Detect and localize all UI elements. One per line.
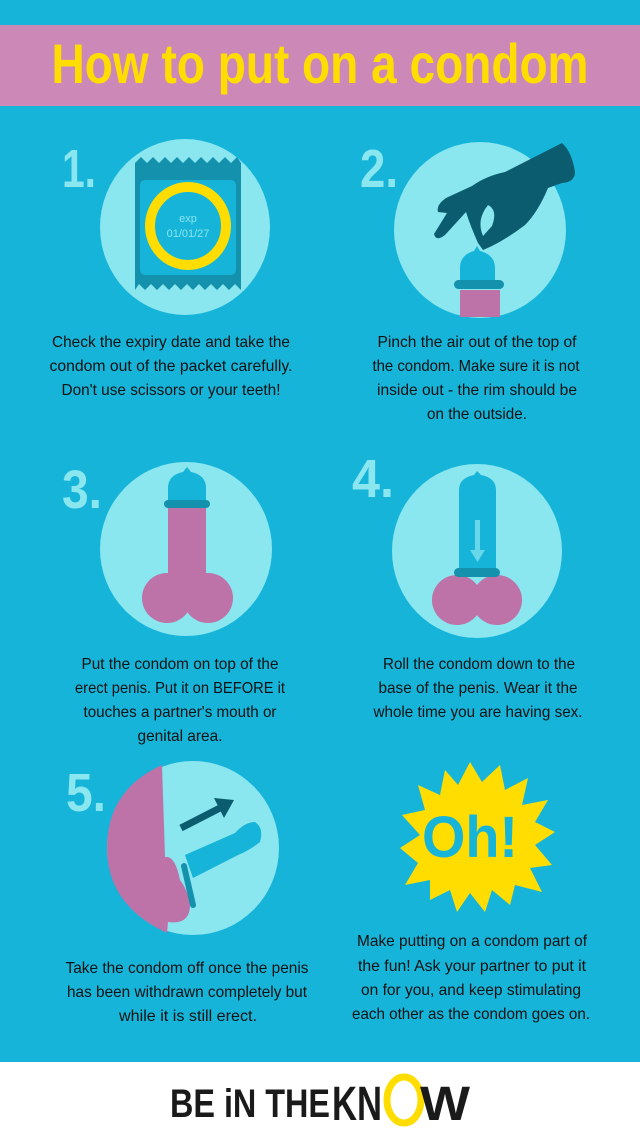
icon: condom rolled down — [392, 464, 562, 638]
step 6 text — [352, 933, 590, 1023]
step 2 number: 2. — [360, 139, 398, 199]
step 1 text: Check the expiry date and take the — [52, 334, 290, 351]
icon: condom packet — [100, 139, 270, 315]
step 3 text — [75, 656, 286, 745]
icon: condom packet: 01/01/27 — [167, 228, 209, 240]
step 6 text: each other as the condom goes on. — [352, 1006, 590, 1023]
step 1 number: 1. — [62, 139, 96, 199]
icon: hand pinching condom — [394, 142, 575, 318]
step 2 text: the condom. Make sure it is not — [372, 358, 580, 375]
logo: W — [420, 1078, 471, 1131]
icon: Oh! burst: Oh! — [422, 805, 518, 870]
step 3 text: touches a partner's mouth or — [84, 704, 277, 721]
step 4 text: Roll the condom down to the — [383, 656, 575, 673]
step 3 text: Put the condom on top of the — [82, 656, 279, 673]
step 2 text — [372, 334, 580, 423]
footer — [0, 1062, 640, 1138]
step 3 text: genital area. — [138, 728, 222, 745]
step 6 text: on for you, and keep stimulating — [361, 982, 581, 999]
icon: removing condom — [107, 761, 279, 935]
step 2 text: on the outside. — [427, 406, 527, 423]
step 3 text: erect penis. Put it on BEFORE it — [75, 680, 286, 697]
step 1 text: condom out of the packet carefully. — [50, 358, 292, 375]
logo — [170, 1077, 471, 1131]
step 6 text: the fun! Ask your partner to put it — [358, 958, 587, 975]
step 2 text: inside out - the rim should be — [377, 382, 577, 399]
icon: condom on tip — [100, 462, 272, 636]
logo: BE iN THE — [170, 1082, 330, 1126]
step 1 text: Don't use scissors or your teeth! — [62, 382, 280, 399]
icon: Oh! burst — [400, 762, 555, 912]
step 4 text: whole time you are having sex. — [373, 704, 582, 721]
step 1 text — [50, 334, 292, 399]
step 5 number: 5. — [66, 763, 106, 823]
step 4 number: 4. — [352, 449, 394, 509]
step 4 text — [373, 656, 582, 721]
step 2 text: Pinch the air out of the top of — [378, 334, 577, 351]
step 4 text: base of the penis. Wear it the — [378, 680, 578, 697]
step 3 number: 3. — [62, 460, 102, 520]
step 6 text: Make putting on a condom part of — [357, 933, 588, 950]
icon: condom packet: exp — [179, 213, 197, 225]
step 5 text — [66, 960, 308, 1025]
step 5 text: has been withdrawn completely but — [67, 984, 308, 1001]
step 5 text: Take the condom off once the penis — [66, 960, 308, 977]
step 5 text: while it is still erect. — [118, 1008, 257, 1025]
logo: KN — [332, 1078, 382, 1131]
